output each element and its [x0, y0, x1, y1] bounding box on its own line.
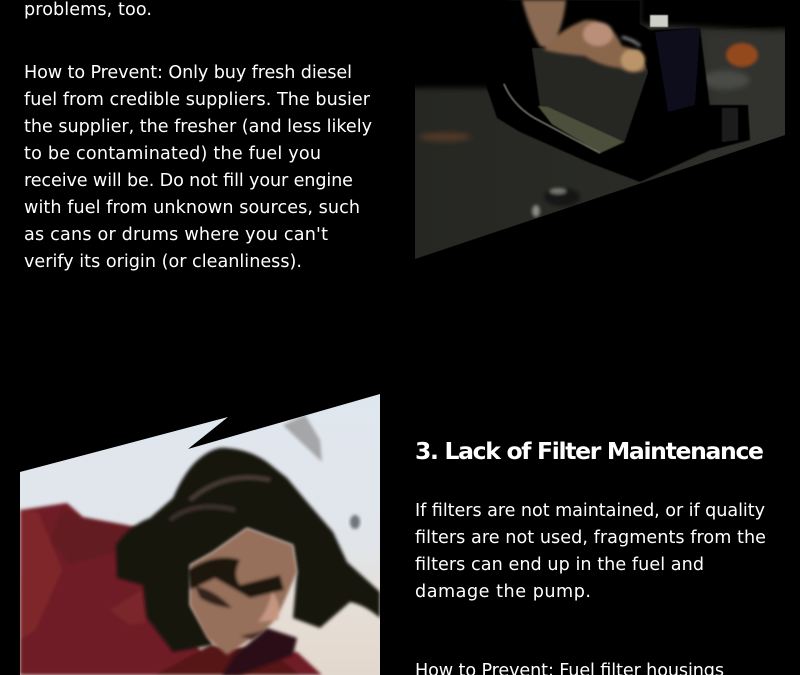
photo: person with long dark hair in red shirt: [20, 390, 380, 675]
small object: [532, 188, 580, 217]
nozzle body: [470, 0, 750, 182]
wall shapes: [283, 415, 322, 462]
hair: [116, 448, 380, 652]
fingers: [522, 0, 645, 73]
face: [188, 528, 297, 655]
heading: 3. Lack of Filter Maintenance: [415, 437, 764, 465]
collar: [222, 628, 297, 675]
text block: filter maintenance description: [415, 501, 766, 602]
text block: how to prevent fuel contamination: [24, 63, 372, 272]
text block: filter maintenance description: filters are not used, fragments from the: [415, 528, 766, 548]
text block: how to prevent fuel contamination: the supplier, the fresher (and less likely: [24, 117, 372, 137]
text block: end of previous paragraph: problems, too.: [24, 0, 152, 20]
text block: how to prevent fuel contamination: as cans or drums where you can't: [24, 225, 328, 245]
text block: how to prevent fuel contamination: with fuel from unknown sources, such: [24, 198, 360, 218]
text block: filter maintenance description: damage the pump.: [415, 582, 591, 602]
text block: filter maintenance description: filters can end up in the fuel and: [415, 555, 704, 575]
text block: how to prevent fuel contamination: receive will be. Do not fill your engine: [24, 171, 353, 191]
text block: how to prevent fuel contamination: verify its origin (or cleanliness).: [24, 252, 302, 272]
text block: how to prevent fuel contamination: How to Prevent: Only buy fresh diesel: [24, 63, 352, 83]
text block: how to prevent fuel contamination: fuel from credible suppliers. The busier: [24, 90, 371, 110]
text block: how to prevent fuel contamination: to be contaminated) the fuel you: [24, 144, 321, 164]
red shirt: [20, 503, 322, 675]
text block: filter maintenance description: If filters are not maintained, or if quality: [415, 501, 765, 521]
photo: hand on fuel nozzle: [410, 0, 790, 260]
orange light: [726, 43, 758, 67]
